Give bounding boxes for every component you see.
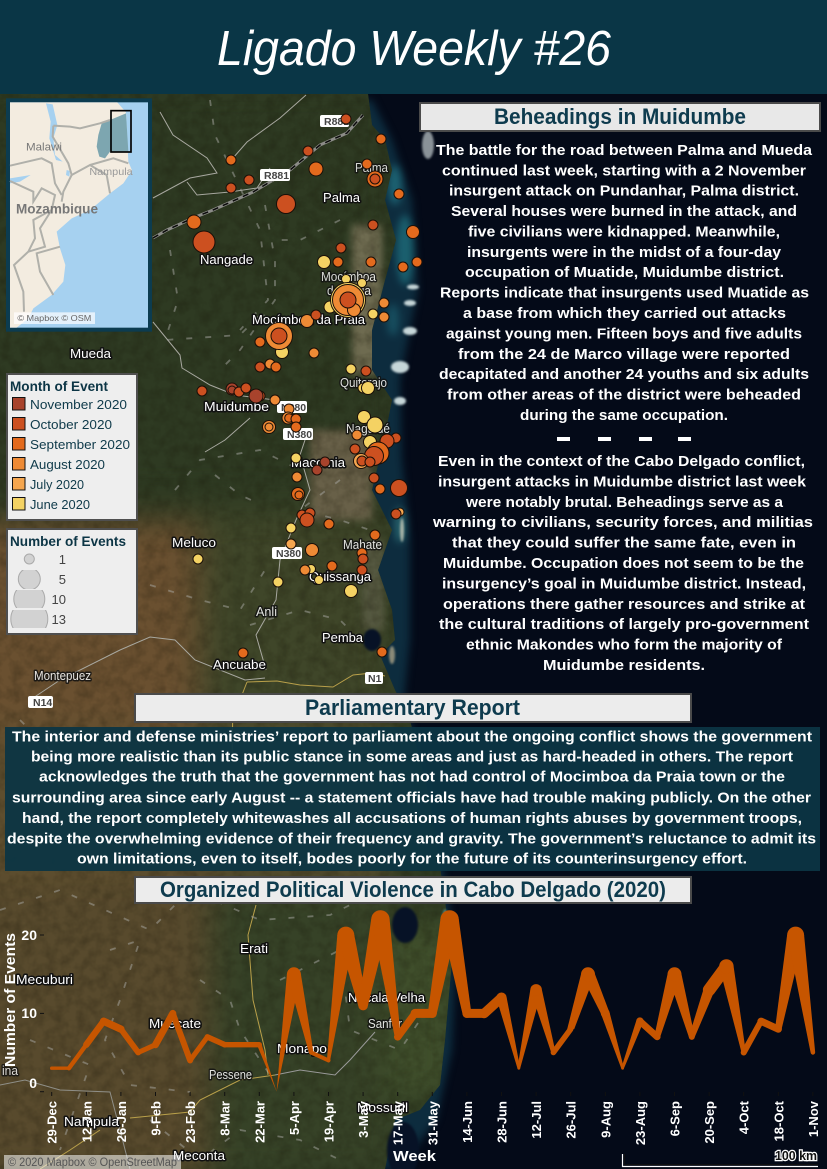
heading: Beheadings in Muidumbe: [420, 103, 820, 131]
text block: first paragraph: from the 24 de Marco village were reported: [458, 346, 790, 363]
text block: second paragraph: insurgency’s goal in Muidumbe district. Instead,: [442, 575, 806, 592]
map place labels: Palma: [323, 190, 361, 205]
map place labels: Erati: [240, 941, 268, 956]
panel: parliamentary report text: surrounding area since early August -- a statement officials have had trouble making publicly. On the other: [12, 790, 811, 807]
text block: first paragraph: Several houses were burned in the attack, and: [451, 203, 797, 220]
title banner: Ligado Weekly #26: [217, 22, 612, 76]
event points on map: [187, 114, 422, 658]
x axis date labels: 8-Mar: [218, 1101, 233, 1136]
map place labels: Quiterajo: [340, 375, 387, 390]
map place labels: Mocímboa: [321, 269, 377, 284]
map place labels: Mocímboa da Praia: [252, 312, 366, 327]
panel: parliamentary report text: The interior and defense ministries’ report to parliament about the ongoing conflict shows the government: [12, 729, 812, 746]
road shields: N1: [368, 673, 382, 685]
legend: month of event: Month of Event: [10, 378, 108, 394]
legend: month of event: July 2020: [30, 477, 84, 492]
axis ticks and value labels: 20: [21, 927, 37, 943]
x axis date labels: 12-Jul: [529, 1101, 544, 1139]
inset locator map: Mozambique: [16, 201, 98, 217]
legend: month of event: [7, 374, 137, 520]
x axis date labels: 26-Jul: [564, 1101, 579, 1139]
x axis date labels: 5-Apr: [287, 1101, 302, 1135]
text block: first paragraph: The battle for the road between Palma and Mueda: [436, 142, 813, 159]
text block: first paragraph: insurgents were in the midst of a four-day: [467, 244, 782, 261]
map place labels: Mahate: [343, 537, 382, 552]
legend: month of event: August 2020: [30, 457, 105, 472]
text block: second paragraph: operations there gather resources and strike at: [443, 596, 805, 613]
text block: first paragraph: continued last week, starting with a 2 November: [442, 162, 806, 179]
x axis date labels: 9-Aug: [598, 1101, 613, 1138]
heading: Parliamentary Report: [135, 694, 691, 722]
text block: second paragraph: Muidumbe. Occupation does not seem to be the: [443, 555, 804, 572]
text block: first paragraph: occupation of Muatide, Muidumbe district.: [465, 264, 784, 281]
heading: Organized Political Violence: Organized Political Violence in Cabo Delgado (2020): [160, 877, 666, 902]
map scale bar: [622, 1148, 818, 1166]
land texture: [0, 94, 470, 1169]
x axis date labels: 12-Jan: [79, 1101, 94, 1142]
axis ticks and value labels: Week: [393, 1148, 437, 1165]
map place labels: Nangade: [200, 252, 253, 267]
map place labels: Monapo: [277, 1041, 327, 1056]
x axis date labels: 14-Jun: [460, 1101, 475, 1143]
bays: [363, 629, 419, 1169]
map place labels: Pemba: [322, 630, 364, 645]
legend: number of events: Number of Events: [10, 533, 126, 549]
panel: parliamentary report text: hand, the report completely whitewashes all accusations of human rights abuses by government troops,: [22, 810, 802, 827]
map scale bar: 100 km: [775, 1148, 817, 1163]
map place labels: Muidumbe: [204, 399, 269, 414]
international border: [153, 115, 363, 238]
text block: first paragraph: insurgent attack on Pundanhar, Palma district.: [449, 183, 799, 200]
map place labels: [2, 160, 426, 1163]
map place labels: Quissanga: [309, 569, 372, 584]
paragraph separator: [557, 437, 691, 441]
map place labels: Pessene: [209, 1067, 252, 1082]
variable-width event line: [52, 910, 815, 1092]
x axis date labels: 1-Nov: [806, 1100, 821, 1137]
map place labels: Muecate: [149, 1016, 201, 1031]
text block: first paragraph: a base from which they carried out attacks: [463, 305, 786, 322]
inset locator map: © Mapbox © OSM: [17, 313, 91, 323]
x axis date labels: 18-Oct: [771, 1100, 786, 1141]
text block: first paragraph: during the same occupation.: [520, 407, 728, 424]
x axis date labels: 26-Jan: [114, 1101, 129, 1142]
axis ticks and value labels: 0: [29, 1075, 37, 1091]
text block: second paragraph: that they could suffer the same fate, even in: [452, 535, 796, 552]
panel: parliamentary report text: own limitations, even to itself, bodes poorly for the future of its counterinsurgency effort.: [77, 850, 747, 868]
text block: second paragraph: were notably brutal. Beheadings serve as a: [465, 494, 784, 511]
legend: month of event: September 2020: [30, 437, 130, 452]
road shields: R881: [264, 170, 289, 182]
heading: Beheadings in Muidumbe: Beheadings in Muidumbe: [494, 104, 746, 129]
map place labels: Nampula: [64, 1114, 120, 1129]
x axis date labels: 3-May: [356, 1100, 371, 1138]
map place labels: da Praia: [327, 283, 372, 298]
road shields: R881: [324, 116, 349, 128]
text block: second paragraph: ethnic Makondes who form the majority of: [466, 637, 783, 654]
axis ticks and value labels: [2, 927, 813, 1165]
map place labels: Montepuez: [34, 668, 91, 683]
x axis date labels: 22-Mar: [252, 1101, 267, 1143]
road network: [0, 95, 375, 1169]
map place labels: Nacala Velha: [348, 990, 426, 1005]
x axis date labels: 28-Jun: [494, 1101, 510, 1143]
satellite map background: [0, 94, 457, 1169]
map place labels: Meconta: [173, 1148, 226, 1163]
inset locator map: [8, 100, 150, 330]
map place labels: Mossuril: [357, 1100, 408, 1115]
legend: month of event: October 2020: [30, 417, 112, 432]
x axis date labels: 31-May: [425, 1100, 440, 1145]
x axis date labels: 20-Sep: [702, 1101, 717, 1144]
inset locator map: Nampula: [89, 167, 133, 178]
legend: month of event: June 2020: [30, 497, 90, 512]
road shields: [28, 115, 383, 709]
axis ticks and value labels: Number of Events: [2, 933, 19, 1067]
map place labels: Nagulué: [346, 421, 390, 436]
text block: first paragraph: from other areas of the district were beheaded: [447, 387, 801, 404]
legend: number of events: 1: [59, 552, 66, 567]
x axis date labels: 9-Feb: [148, 1101, 164, 1136]
reefs and clouds: [389, 131, 448, 941]
panel: parliamentary report text: [5, 727, 820, 871]
map place labels: Mueda: [70, 346, 112, 361]
x axis date labels: 19-Apr: [322, 1101, 336, 1142]
text block: first paragraph: [436, 142, 813, 424]
map place labels: ina: [2, 1063, 19, 1078]
map place labels: Ancuabe: [213, 657, 266, 672]
legend: number of events: 10: [52, 592, 66, 607]
text block: second paragraph: the cultural traditions of largely pro-government: [439, 616, 809, 633]
ocean shallows: [360, 100, 456, 1169]
text block: second paragraph: Even in the context of the Cabo Delgado conflict,: [438, 453, 805, 470]
legend: month of event: November 2020: [30, 397, 127, 412]
panel: parliamentary report text: being more realistic than its public stance in some areas and just as hard-headed in others. The report: [31, 749, 793, 766]
x axis date labels: 6-Sep: [668, 1101, 682, 1136]
text block: second paragraph: [432, 453, 813, 674]
road shields: N380: [276, 548, 301, 560]
land: [0, 80, 470, 1169]
x axis date labels: 29-Dec: [45, 1101, 60, 1144]
x axis date labels: 17-May: [391, 1100, 406, 1145]
road shields: N14: [33, 697, 52, 709]
text block: second paragraph: Muidumbe residents.: [543, 657, 705, 674]
map attribution: © 2020 Mapbox © OpenStreetMap: [8, 1157, 177, 1169]
x axis date labels: 23-Aug: [633, 1101, 648, 1145]
text block: first paragraph: Reports indicate that insurgents used Muatide as: [440, 285, 809, 302]
map place labels: Sanfor: [368, 1016, 403, 1031]
panel: parliamentary report text: despite the overwhelming evidence of their frequency and gravity. The government’s reluctance to admit its: [7, 830, 816, 848]
road shields: N380: [287, 429, 312, 441]
map place labels: Mecuburi: [16, 972, 73, 987]
map place labels: Anli: [256, 604, 277, 619]
panel: parliamentary report text: acknowledges the truth that the government has not had control of Mocimboa da Praia town or the: [39, 769, 785, 786]
map place labels: Macomia: [291, 455, 346, 470]
legend: number of events: 13: [52, 612, 66, 627]
inset locator map: Malawi: [26, 142, 62, 154]
text block: first paragraph: against young men. Fifteen boys and five adults: [446, 325, 802, 342]
x axis date labels: [45, 1100, 821, 1145]
text block: second paragraph: warning to civilians, security forces, and militias: [432, 514, 813, 531]
x axis date labels: 4-Oct: [737, 1100, 752, 1134]
text block: first paragraph: decapitated and another 24 youths and six adults: [439, 366, 809, 383]
map place labels: Meluco: [172, 535, 216, 550]
text block: first paragraph: five civilians were kidnapped. Meanwhile,: [468, 223, 780, 240]
title banner: [0, 0, 827, 94]
heading: Parliamentary Report: Parliamentary Report: [305, 695, 521, 720]
map place labels: Palma: [355, 160, 389, 175]
legend: number of events: 5: [59, 572, 66, 587]
legend: number of events: [7, 529, 137, 638]
axis ticks and value labels: 10: [21, 1005, 37, 1021]
x axis date labels: 23-Feb: [183, 1101, 198, 1143]
text block: second paragraph: insurgent attacks in Muidumbe district last week: [438, 473, 807, 490]
road shields: N380: [281, 402, 306, 414]
chart: weekly number of events: [2, 910, 821, 1165]
